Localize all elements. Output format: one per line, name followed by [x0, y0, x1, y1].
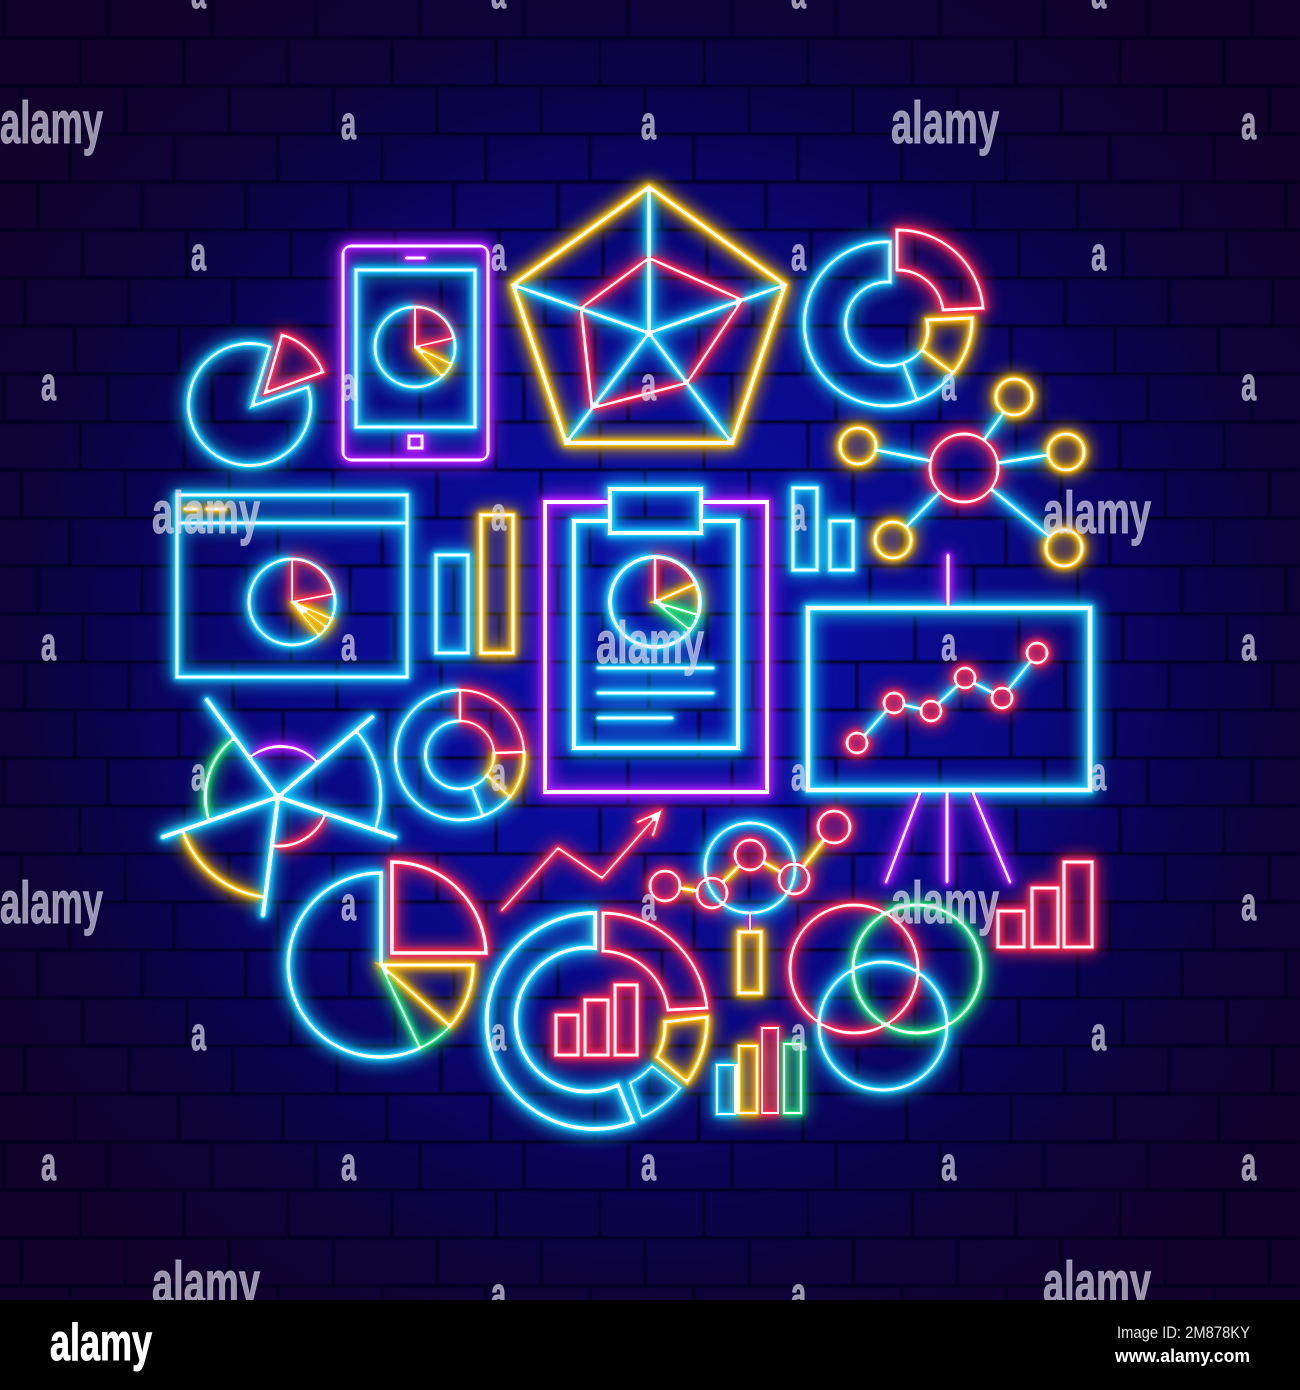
watermarks: aa [491, 488, 807, 541]
watermarks: aaaa [191, 228, 1107, 281]
bar chart: two bars left of clipboard [436, 515, 513, 653]
arrow: rising trend line [502, 812, 660, 910]
watermarks: alamy [891, 90, 999, 156]
watermarks: aaaa [191, 1008, 1107, 1061]
website: www.alamy.com [1114, 1346, 1250, 1366]
footer logo: alamy [50, 1314, 152, 1372]
watermarks: aaaaa [41, 358, 1257, 411]
watermarks: aaaa [41, 618, 1257, 671]
watermarks: aaa [341, 97, 1257, 150]
footer band [0, 1300, 1300, 1390]
watermarks: alamy [152, 1250, 260, 1316]
watermarks: alamy [0, 90, 103, 156]
watermarks: alamy [1043, 480, 1151, 546]
icon: magnifier with line chart [650, 811, 850, 993]
icon: exploded radial pie [163, 700, 395, 915]
watermarks: aaaaa [41, 1138, 1257, 1191]
watermarks: aaa [341, 878, 1257, 931]
icon: network nodes [840, 379, 1084, 566]
watermarks: alamy [596, 610, 704, 676]
icon: segmented donut top right [804, 230, 983, 406]
watermarks: aa [491, 1268, 807, 1321]
bar chart: red bars right [998, 862, 1092, 947]
icon: small segmented donut [395, 690, 524, 820]
watermarks: alamy [1043, 1250, 1151, 1316]
bar chart: two bars right of clipboard [793, 488, 853, 570]
icon: browser window with pie chart [177, 495, 407, 677]
watermarks: alamy [152, 480, 260, 546]
watermarks: aaaa [191, 748, 1107, 801]
icon: clipboard with pie chart and text lines [545, 489, 767, 792]
watermarks: alamy [891, 870, 999, 936]
icon: venn diagram [790, 905, 981, 1090]
icon: pie chart top left [189, 335, 323, 465]
neon icon artwork [163, 187, 1092, 1129]
icon: large pie chart [288, 862, 486, 1057]
watermarks: alamy [0, 870, 103, 936]
icon: large donut with bars [487, 913, 707, 1129]
bar chart: four thin bars [717, 1028, 801, 1114]
icon: tablet with pie chart [343, 246, 488, 460]
icon: presentation board with line chart [808, 555, 1090, 882]
icon: radar chart pentagon [513, 187, 785, 443]
image id: Image ID: 2M878KY [1117, 1323, 1250, 1342]
